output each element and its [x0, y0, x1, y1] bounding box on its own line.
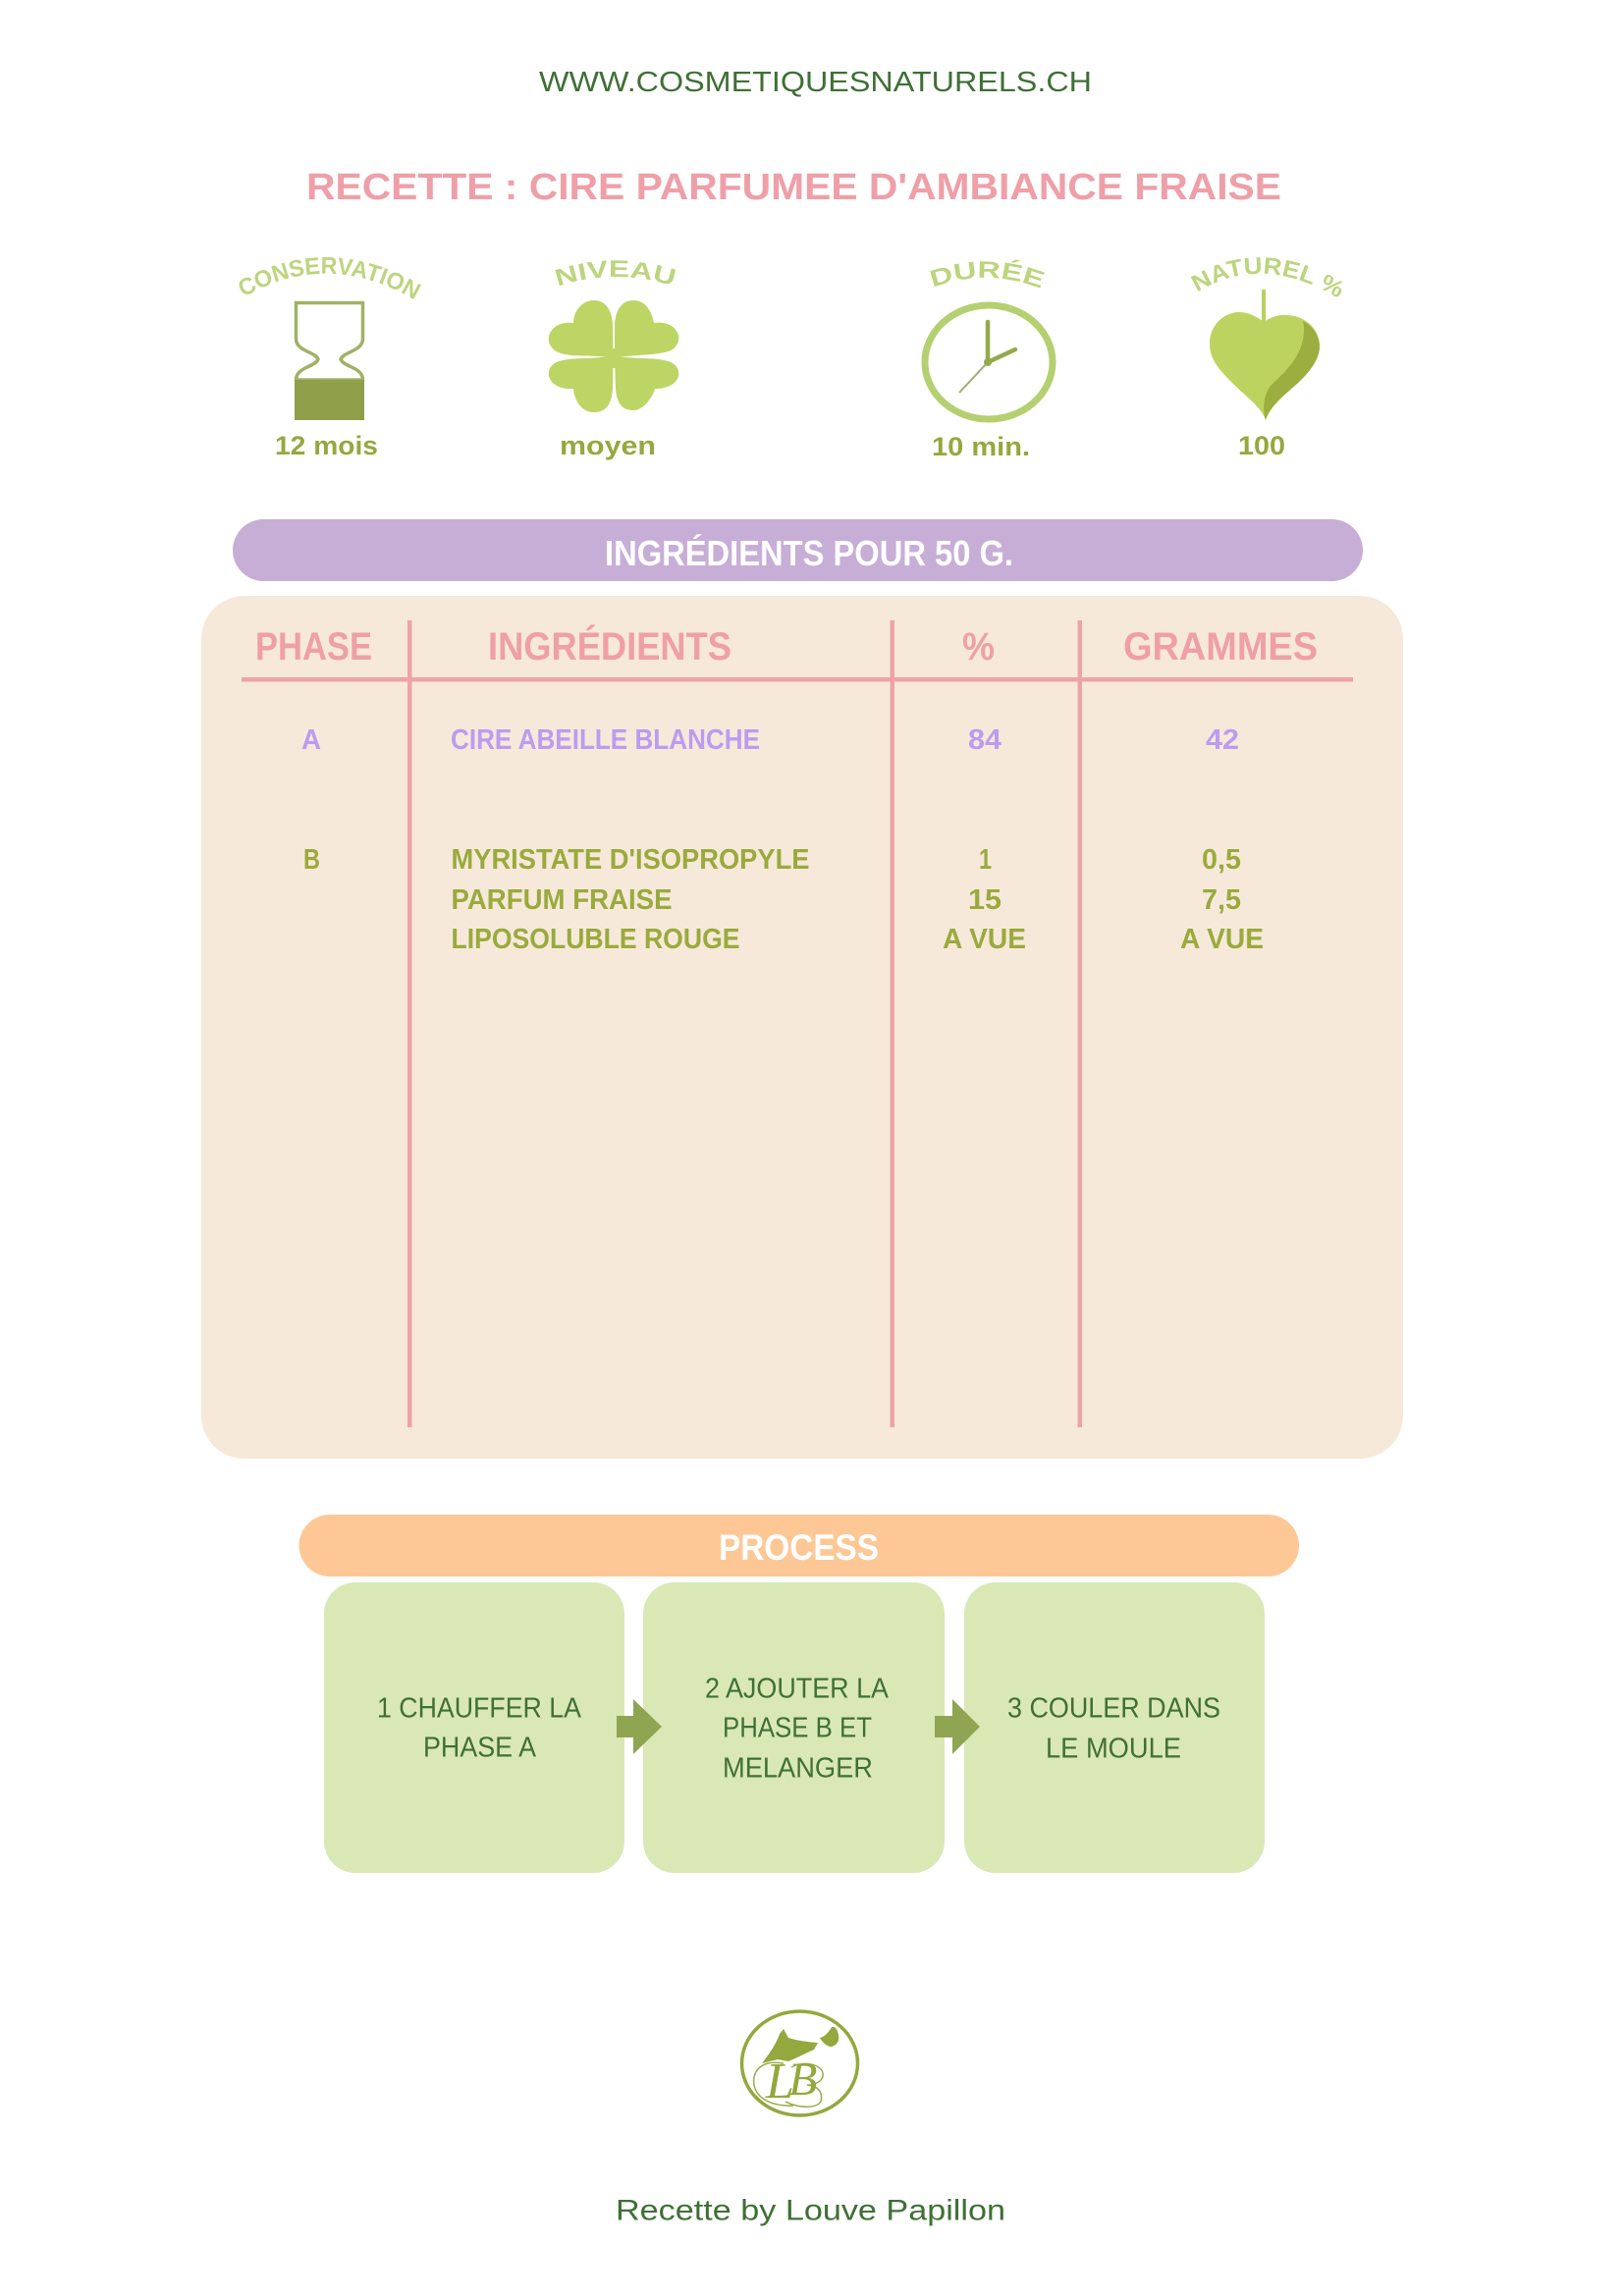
- process step 2: 2 AJOUTER LA: [705, 1673, 890, 1704]
- conservation value: 12 mois: [275, 431, 378, 460]
- website url: WWW.COSMETIQUESNATURELS.CH: [539, 67, 1092, 98]
- phase B rows: 1: [979, 844, 992, 876]
- phase B rows: 15: [968, 884, 1001, 916]
- wolf head: [762, 2029, 818, 2063]
- icon group: duree: [921, 259, 1056, 461]
- process step 3: LE MOULE: [1046, 1734, 1181, 1765]
- process step 1: PHASE A: [423, 1732, 537, 1763]
- duree label: DURÉE: [930, 259, 1045, 289]
- process banner: [298, 1515, 1299, 1576]
- phase B rows: 7,5: [1202, 884, 1241, 916]
- phase B rows: [303, 844, 1264, 955]
- phase A row: 84: [968, 724, 1001, 756]
- phase B rows: PARFUM FRAISE: [452, 884, 672, 916]
- arrow: step 1 to step 2: [617, 1699, 662, 1754]
- column heading: phase: PHASE: [255, 625, 372, 668]
- phase B rows: A VUE: [1180, 924, 1264, 955]
- phase A row: A: [301, 724, 321, 756]
- butterfly: [820, 2027, 839, 2047]
- ingredients banner: [233, 519, 1363, 581]
- icon group: conservation: [240, 257, 421, 460]
- phase A row: CIRE ABEILLE BLANCHE: [451, 724, 760, 756]
- phase A row: [301, 724, 1239, 756]
- table grid lines: [242, 620, 1353, 1427]
- niveau value: moyen: [560, 431, 656, 460]
- column heading: percent: %: [962, 625, 995, 668]
- title: RECETTE : CIRE PARFUMEE D'AMBIANCE FRAISE: [306, 167, 1281, 208]
- monogram swirls: [754, 2062, 823, 2107]
- monogram letters: L: [765, 2054, 794, 2109]
- column heading: ingredients: INGRÉDIENTS: [488, 624, 731, 668]
- icon: clock: [925, 305, 1053, 419]
- naturel label: NATUREL %: [1190, 257, 1343, 296]
- icon group: naturel: [1190, 257, 1343, 460]
- process step 1: 1 CHAUFFER LA: [377, 1692, 582, 1724]
- process step 2: [643, 1582, 945, 1873]
- conservation label: CONSERVATION: [240, 257, 421, 299]
- phase B rows: MYRISTATE D'ISOPROPYLE: [452, 844, 809, 876]
- phase B rows: LIPOSOLUBLE ROUGE: [452, 924, 740, 955]
- logo: Louve Papillon: B: [788, 2054, 817, 2106]
- process step 1: [324, 1582, 624, 1873]
- logo: Louve Papillon: [742, 2011, 858, 2115]
- panel: ingredients table: [201, 596, 1403, 1459]
- icon group: niveau: [548, 260, 679, 460]
- icon: four-leaf clover: [549, 300, 678, 412]
- process banner: PROCESS: [719, 1527, 879, 1568]
- duree value: 10 min.: [932, 432, 1030, 461]
- niveau label: NIVEAU: [556, 260, 676, 286]
- icon: heart leaf: [1210, 290, 1320, 420]
- process step 3: [964, 1582, 1265, 1873]
- naturel value: 100: [1238, 431, 1285, 460]
- ingredients banner: INGRÉDIENTS POUR 50 G.: [605, 533, 1013, 573]
- phase B rows: A VUE: [943, 924, 1026, 955]
- arrow: step 2 to step 3: [935, 1699, 980, 1754]
- process step 2: MELANGER: [723, 1753, 873, 1785]
- process step 3: 3 COULER DANS: [1007, 1692, 1220, 1724]
- icon: hourglass: [295, 302, 364, 420]
- footer credit: Recette by Louve Papillon: [616, 2195, 1005, 2226]
- process step 2: PHASE B ET: [723, 1712, 872, 1743]
- column heading: grams: GRAMMES: [1123, 625, 1318, 668]
- phase A row: 42: [1206, 724, 1239, 756]
- phase B rows: B: [303, 844, 320, 876]
- phase B rows: 0,5: [1202, 844, 1241, 876]
